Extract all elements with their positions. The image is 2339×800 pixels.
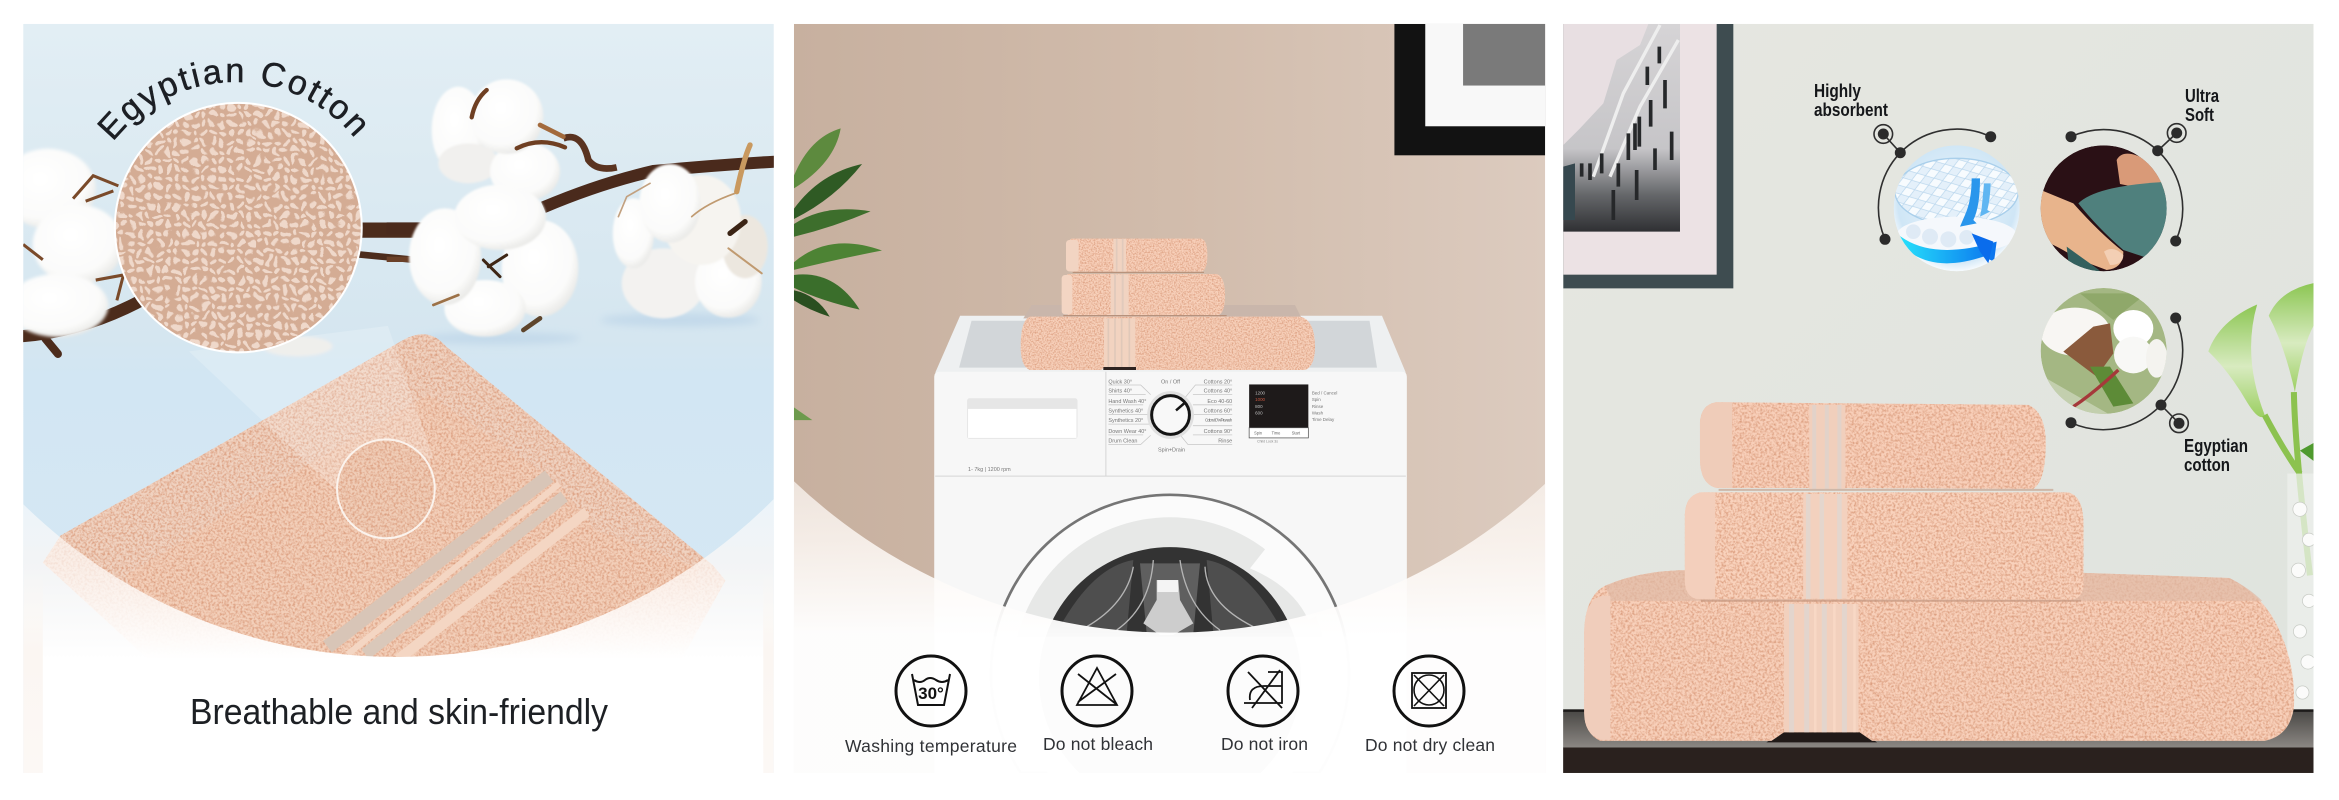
washing machine	[934, 316, 1407, 633]
towel contact shadows	[1701, 490, 2081, 601]
photo buildings	[1563, 24, 1680, 232]
small source circle	[337, 439, 435, 538]
digital display: Wash	[1312, 410, 1324, 416]
right cotton bolls on branch	[387, 79, 775, 344]
folded towel stack on washer	[1021, 239, 1315, 370]
icon: absorbent pad	[1894, 145, 2020, 271]
main branch	[387, 162, 775, 228]
washer body	[934, 372, 1407, 606]
digital display: Spin	[1312, 397, 1321, 402]
magnified fabric circle	[114, 102, 363, 354]
digital display: 1000	[1255, 397, 1266, 402]
programme labels: Synthetics 20°	[1108, 418, 1143, 424]
caption: Breathable and skin-friendly: Breathable and skin-friendly	[190, 691, 608, 732]
far boll	[613, 164, 768, 318]
label: Ultra Soft: Soft	[2185, 105, 2214, 125]
digital display: 1200	[1255, 391, 1266, 396]
upper boll	[432, 79, 560, 201]
programme labels: Eco 40-60	[1207, 399, 1232, 405]
label: Egyptian cotton: cotton	[2184, 455, 2230, 475]
panel: towel set and features	[1563, 24, 2318, 773]
white curved overlay	[23, 499, 774, 773]
medium hand towel	[1685, 492, 2083, 600]
programme labels: Cottons 20°	[1204, 379, 1232, 385]
digital display: 800	[1255, 404, 1263, 409]
wall background	[1563, 24, 2314, 773]
small towel	[1066, 239, 1207, 272]
programme labels: Synthetics 40°	[1108, 408, 1143, 414]
ring callout: highly absorbent	[1874, 125, 1996, 245]
digital display: Time	[1272, 430, 1281, 435]
feature images	[1894, 145, 2170, 417]
programme labels: Cottons 60°	[1204, 408, 1232, 414]
care icon: do not dry clean	[1394, 656, 1464, 726]
large bath towel	[1584, 570, 2294, 741]
programme labels: Hand Wash 40°	[1108, 399, 1146, 405]
label: Egyptian cotton: Egyptian	[2184, 436, 2248, 456]
potted plant leaves	[794, 128, 882, 420]
programme labels: On / Off	[1161, 379, 1180, 385]
translucent white curved overlay	[794, 481, 1545, 773]
framed picture	[1394, 24, 1545, 155]
digital display: Start	[1292, 430, 1301, 435]
small washcloth towel	[1700, 402, 2046, 489]
label: Washing temperature: Washing temperature	[845, 736, 1017, 756]
left cotton branch	[23, 230, 423, 354]
shelf	[1563, 709, 2314, 773]
ring callout: Egyptian cotton	[2066, 312, 2188, 433]
towel woven stripes	[327, 476, 587, 659]
boll husks	[433, 90, 762, 330]
left cotton boll	[0, 149, 333, 356]
care icon: washing temperature	[896, 656, 966, 726]
frame	[1563, 24, 1733, 288]
digital display: Time Delay	[1312, 417, 1335, 422]
large towel	[1021, 305, 1315, 370]
plant	[2208, 283, 2314, 575]
digital display: Spin	[1254, 430, 1262, 435]
digital display	[1249, 384, 1337, 444]
label: Highly absorbent: absorbent	[1814, 100, 1888, 120]
programme labels	[1108, 379, 1233, 454]
right off-white edge	[764, 636, 774, 773]
icon: cotton plant	[2040, 288, 2167, 417]
care icon: do not bleach	[1062, 656, 1132, 726]
middle boll	[409, 185, 578, 337]
ground shadow	[600, 313, 760, 327]
label: Do not iron: Do not iron	[1221, 734, 1308, 754]
mat	[1563, 24, 1717, 275]
left off-white edge	[24, 636, 42, 773]
program dial	[1147, 391, 1194, 439]
washer top	[935, 316, 1406, 373]
programme labels: Shirts 40°	[1108, 389, 1132, 395]
magnifier light beam	[203, 345, 433, 490]
curved heading: Egyptian Cotton: Egyptian Cotton	[97, 62, 366, 140]
towel notch shadow	[1766, 732, 1877, 742]
label: Do not dry clean: Do not dry clean	[1365, 735, 1495, 755]
programme labels: Spin+Drain	[1158, 448, 1185, 454]
care icon: washing temperature: 30°	[918, 684, 944, 703]
rating label: 1- 7kg | 1200 rpm	[968, 467, 1011, 473]
panel: washer care instructions	[794, 24, 1545, 773]
wall background	[794, 24, 1545, 595]
programme labels: Quick 30°	[1108, 379, 1132, 385]
digital display: Bed / Cancel	[1312, 391, 1337, 396]
programme labels: Cottons 60° w/ Prewash	[1205, 418, 1233, 423]
glass vase	[2288, 474, 2314, 709]
photo sky	[1563, 24, 1680, 232]
framed city photo	[1563, 24, 1733, 288]
care icon: do not iron	[1228, 656, 1298, 726]
programme labels: Cottons 40°	[1204, 389, 1232, 395]
digital display: Child Lock 3s	[1257, 439, 1278, 444]
label: Egyptian cotton	[2184, 436, 2248, 475]
ring callout: ultra soft	[2066, 124, 2186, 246]
detergent drawer	[967, 398, 1078, 439]
bottom wash over door	[935, 636, 1406, 773]
programme labels: Cottons 90°	[1204, 429, 1232, 435]
programme labels: Drum Clean	[1108, 438, 1137, 445]
door	[1001, 494, 1338, 633]
towel corner	[43, 334, 725, 662]
programme labels: Rinse	[1218, 438, 1232, 445]
digital display: 600	[1255, 410, 1263, 416]
label: Ultra Soft: Ultra	[2185, 86, 2220, 106]
towel gap shadows	[1063, 272, 1227, 316]
label: Highly absorbent	[1814, 81, 1888, 120]
panel background	[23, 24, 774, 624]
panel: Egyptian cotton close-up	[23, 24, 774, 773]
icon: hand feeling soft towel	[2037, 145, 2170, 275]
programme labels: Down Wear 40°	[1108, 429, 1146, 435]
medium towel	[1062, 274, 1225, 315]
digital display: Rinse	[1312, 404, 1324, 409]
label: Do not bleach: Do not bleach	[1043, 734, 1153, 754]
label: Ultra Soft	[2185, 86, 2220, 125]
label: Highly absorbent: Highly	[1814, 81, 1861, 101]
